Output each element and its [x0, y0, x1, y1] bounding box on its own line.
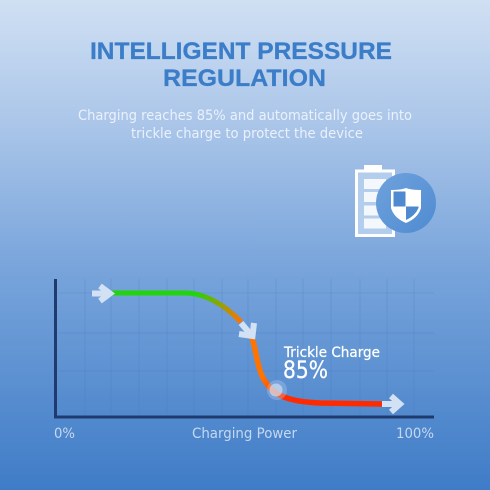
curve: orange to red section — [252, 338, 382, 404]
title: REGULATION — [163, 65, 326, 92]
arrow: end — [382, 396, 400, 412]
callout: trickle charge — [283, 345, 380, 384]
line chart — [54, 279, 434, 442]
callout: trickle charge: 85% — [283, 356, 328, 384]
arrow: middle — [239, 323, 254, 336]
subtitle text: Charging reaches 85% and automatically goes into — [78, 108, 412, 124]
icon: battery with shield — [356, 165, 436, 236]
arrow: start — [92, 286, 110, 301]
axis labels — [54, 426, 434, 442]
icon: shield badge — [376, 173, 436, 233]
axis labels: 100% — [396, 426, 434, 442]
axis labels: 0% — [54, 426, 75, 442]
chart axes — [56, 279, 434, 417]
chart grid — [58, 279, 434, 415]
subtitle text — [78, 108, 412, 142]
title — [90, 38, 392, 92]
callout: trickle charge: Trickle Charge — [283, 345, 380, 361]
title: INTELLIGENT PRESSURE — [90, 38, 392, 65]
marker: 85% point — [267, 380, 287, 400]
curve: green to orange section — [112, 293, 241, 322]
subtitle text: trickle charge to protect the device — [131, 126, 363, 142]
axis labels: Charging Power — [192, 426, 297, 442]
icon: battery — [356, 165, 394, 236]
